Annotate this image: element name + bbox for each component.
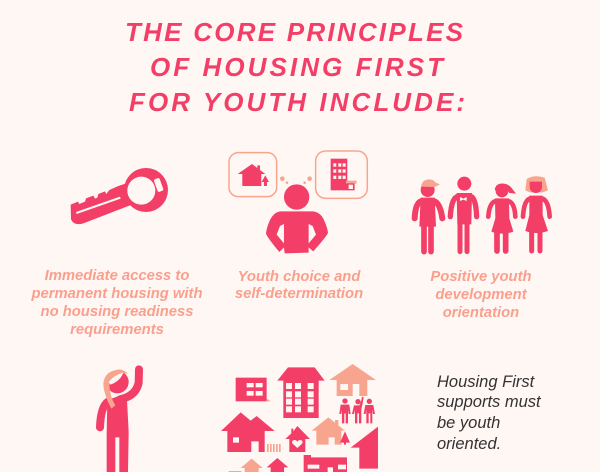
window building bbox=[236, 378, 271, 401]
boy with bow tie bbox=[450, 177, 477, 252]
icon: cluster of houses bbox=[221, 364, 378, 472]
long pink building bottom bbox=[304, 455, 347, 472]
boy with cap bbox=[415, 179, 442, 252]
title: OF HOUSING FIRST bbox=[150, 52, 445, 82]
figure bbox=[266, 184, 328, 253]
small fence bottom bbox=[229, 470, 241, 472]
icon: house thought bubble bbox=[229, 153, 277, 197]
small pink house bottom bbox=[267, 458, 288, 472]
girl with ponytail bbox=[488, 183, 516, 251]
caption: youth choice: Youth choice and bbox=[238, 269, 361, 285]
large pink double-gable house bbox=[221, 412, 275, 452]
thought dots bbox=[280, 176, 312, 184]
icon: four youth figures bbox=[415, 176, 550, 252]
salmon house top right bbox=[329, 364, 376, 396]
title bbox=[125, 17, 465, 117]
icon: woman raising hand bbox=[100, 369, 139, 472]
girl with long hair bbox=[523, 176, 550, 251]
salmon house middle bbox=[312, 417, 345, 445]
caption: youth choice bbox=[235, 269, 363, 302]
caption: immediate access: no housing readiness bbox=[41, 304, 193, 320]
apartment tower bbox=[277, 367, 325, 418]
three small people bbox=[339, 397, 375, 423]
caption: positive youth development: orientation bbox=[443, 305, 519, 321]
title: FOR YOUTH INCLUDE: bbox=[129, 87, 465, 117]
tree bbox=[340, 431, 350, 445]
caption: immediate access: requirements bbox=[70, 322, 164, 338]
caption: positive youth development bbox=[430, 269, 532, 321]
caption: positive youth development: development bbox=[435, 287, 528, 303]
roof shape right bbox=[351, 427, 378, 469]
text: youth oriented note: Housing First bbox=[437, 373, 536, 391]
icon: key bbox=[71, 168, 168, 224]
caption: youth choice: self-determination bbox=[235, 286, 363, 302]
small salmon house bottom bbox=[241, 459, 263, 472]
icon: person choosing between house and apartment bbox=[229, 151, 367, 253]
caption: immediate access bbox=[30, 268, 202, 338]
caption: immediate access: Immediate access to bbox=[45, 268, 189, 284]
caption: positive youth development: Positive youth bbox=[430, 269, 532, 285]
text: youth oriented note: be youth bbox=[437, 414, 500, 432]
small house with heart bbox=[285, 426, 310, 452]
text: youth oriented note: oriented. bbox=[437, 435, 501, 453]
icon: apartment thought bubble bbox=[316, 151, 367, 198]
fence bbox=[267, 444, 281, 452]
title: THE CORE PRINCIPLES bbox=[125, 17, 464, 47]
text: youth oriented note: supports must bbox=[437, 393, 542, 411]
caption: immediate access: permanent housing with bbox=[30, 286, 202, 302]
text: youth oriented note bbox=[437, 373, 542, 453]
